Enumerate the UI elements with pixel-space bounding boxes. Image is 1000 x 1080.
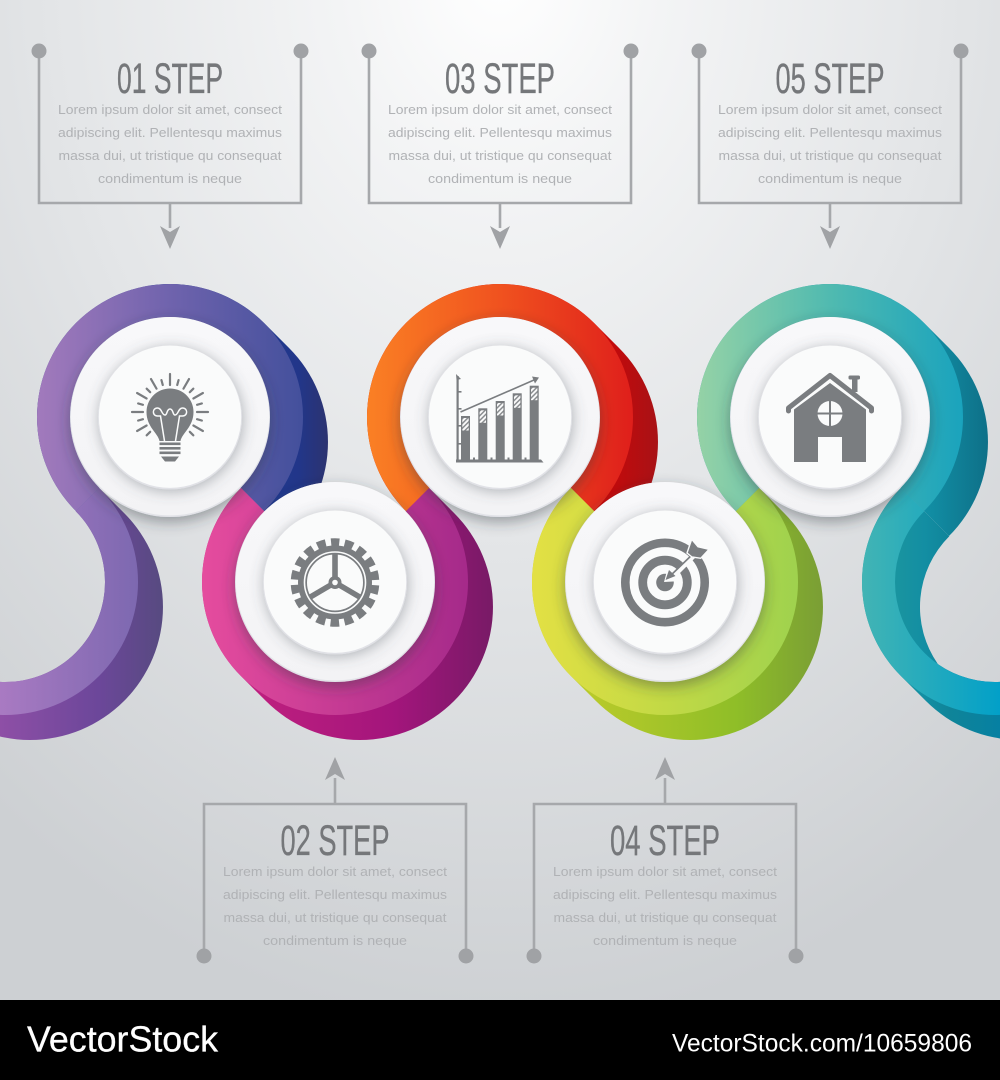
body text: Lorem ipsum dolor sit amet, consect <box>223 865 448 879</box>
ribbon light band layer <box>0 300 1000 698</box>
icon: light bulb <box>132 374 208 462</box>
body text: adipiscing elit. Pellentesqu maximus <box>388 126 612 140</box>
step 1 disc with light bulb <box>70 317 270 517</box>
frame with end dots <box>32 44 308 203</box>
step 3 disc with bar chart <box>400 317 600 517</box>
body text: Lorem ipsum dolor sit amet, consect <box>388 103 613 117</box>
body text: condimentum is neque <box>263 934 407 948</box>
body text: massa dui, ut tristique qu consequat <box>388 149 612 163</box>
panel: 05 STEP callout <box>692 44 968 249</box>
body text <box>388 103 613 186</box>
footer bar <box>0 1000 1000 1080</box>
arrow: up to step 4 <box>655 757 675 804</box>
arrow: up to step 2 <box>325 757 345 804</box>
body text: condimentum is neque <box>593 934 737 948</box>
heading: 03 STEP <box>445 55 555 103</box>
frame with end dots <box>692 44 968 203</box>
frame with end dots <box>526 804 804 964</box>
body text: adipiscing elit. Pellentesqu maximus <box>223 888 447 902</box>
panel: 02 STEP callout <box>196 757 474 964</box>
heading: 04 STEP <box>610 817 720 865</box>
body text: Lorem ipsum dolor sit amet, consect <box>58 103 283 117</box>
body text: condimentum is neque <box>428 172 572 186</box>
panel: 03 STEP callout <box>362 44 638 249</box>
watermark logo: VectorStock <box>27 1018 219 1060</box>
body text: condimentum is neque <box>98 172 242 186</box>
body text: Lorem ipsum dolor sit amet, consect <box>718 103 943 117</box>
step 5 disc with house <box>730 317 930 517</box>
body text: massa dui, ut tristique qu consequat <box>224 911 447 925</box>
body text: condimentum is neque <box>758 172 902 186</box>
step 2 disc with gear <box>235 482 435 682</box>
watermark url: VectorStock.com/10659806 <box>672 1030 972 1058</box>
body text: massa dui, ut tristique qu consequat <box>58 149 282 163</box>
body text: Lorem ipsum dolor sit amet, consect <box>553 865 778 879</box>
icon: gear with spokes <box>295 542 375 622</box>
body text <box>718 103 943 186</box>
arrow: down to step 5 <box>820 203 840 249</box>
body text: massa dui, ut tristique qu consequat <box>554 911 777 925</box>
icon: house <box>788 376 872 462</box>
icon: rising bar chart <box>456 374 544 462</box>
body text <box>58 103 283 186</box>
heading: 05 STEP <box>776 55 884 103</box>
step 4 disc with target <box>565 482 765 682</box>
body text: adipiscing elit. Pellentesqu maximus <box>553 888 777 902</box>
arrow: down to step 1 <box>160 203 180 249</box>
body text <box>223 865 448 948</box>
body text: massa dui, ut tristique qu consequat <box>718 149 942 163</box>
heading: 01 STEP <box>117 55 223 103</box>
frame with end dots <box>362 44 638 203</box>
body text: adipiscing elit. Pellentesqu maximus <box>58 126 282 140</box>
body text: adipiscing elit. Pellentesqu maximus <box>718 126 942 140</box>
ribbon depth layer <box>0 284 1000 740</box>
frame with end dots <box>196 804 474 964</box>
body text <box>553 865 778 948</box>
panel: 04 STEP callout <box>526 757 804 964</box>
panel: 01 STEP callout <box>32 44 308 249</box>
arrow: down to step 3 <box>490 203 510 249</box>
icon: target with arrow <box>625 539 709 622</box>
heading: 02 STEP <box>280 817 390 865</box>
